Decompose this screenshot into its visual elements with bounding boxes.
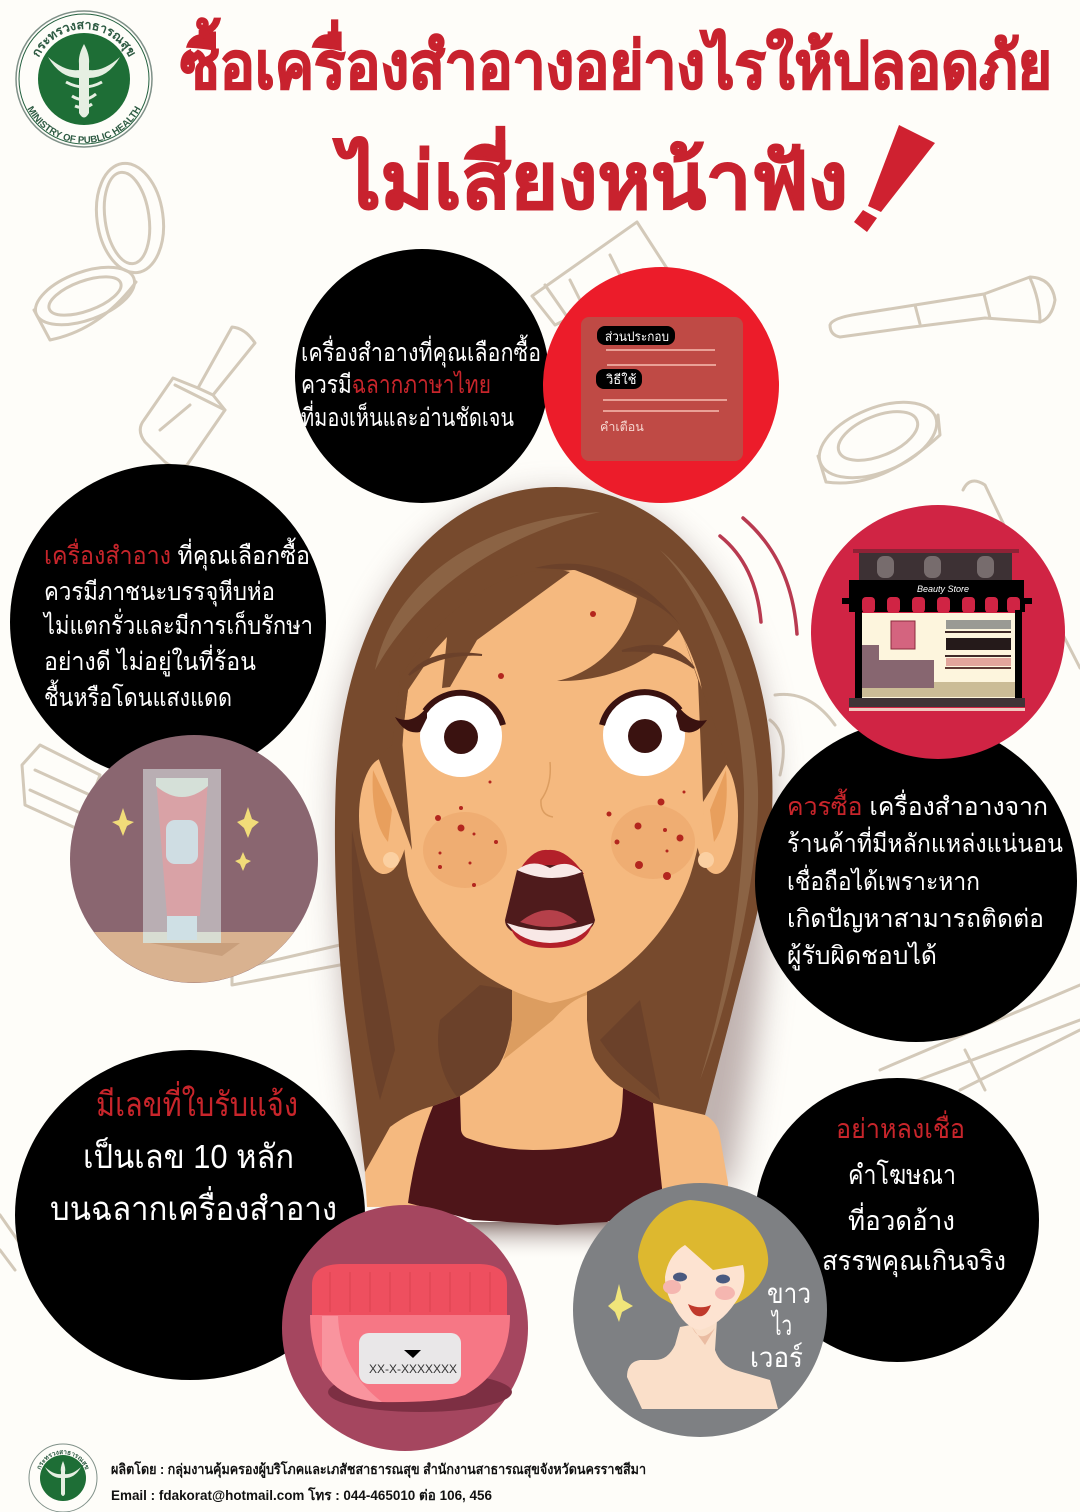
panel: store advice xyxy=(755,720,1077,1042)
arrows: motion arcs xyxy=(720,518,797,634)
neck and shoulders xyxy=(365,970,728,1207)
footer logo xyxy=(28,1444,98,1512)
doodle: compact behind head xyxy=(770,694,835,775)
illustration: shocked woman xyxy=(335,487,772,1260)
footer text: ผลิตโดย : กลุ่มงานคุ้มครองผู้บริโภคและเภสัชสาธารณสุข สำนักงานสาธารณสุขจังหวัดนครราชสีมา xyxy=(111,1460,646,1478)
panel: store advice: ควรซื้อ เครื่องสำอางจาก xyxy=(787,788,1048,821)
hair back xyxy=(335,487,772,1172)
panel: packaging advice: ควรมีภาชนะบรรจุหีบห่อ xyxy=(44,578,275,607)
panel: do not trust ads xyxy=(755,1078,1039,1362)
panel: beauty store illustration: Beauty Store xyxy=(917,584,969,594)
title: ไม่เสี่ยงหน้าฟัง xyxy=(333,126,848,225)
panel: label illustration: ส่วนประกอบ xyxy=(605,329,669,344)
panel: packaging advice xyxy=(10,464,326,780)
panel: packaging advice: ไม่แตกรั่วและมีการเก็บรักษา xyxy=(42,608,313,640)
tank top xyxy=(408,1088,662,1225)
panel: beauty store illustration xyxy=(811,505,1065,759)
doodle: nail brush xyxy=(963,481,1080,668)
doodle: brush xyxy=(830,277,1055,337)
nose xyxy=(541,762,553,817)
ears xyxy=(359,758,409,874)
panel: advert woman: ขาว xyxy=(767,1278,811,1309)
doodle: lipstick left xyxy=(232,945,340,985)
face xyxy=(401,570,707,1003)
panel: advert woman xyxy=(573,1183,827,1437)
panel: cosmetic jar xyxy=(282,1205,528,1451)
lashes xyxy=(395,692,707,732)
panel: registration number advice: เป็นเลข 10 หลัก xyxy=(83,1137,294,1175)
panel: do not trust ads: สรรพคุณเกินจริง xyxy=(822,1246,1006,1278)
panel: cosmetic jar: XX-X-XXXXXXX xyxy=(369,1362,457,1376)
mouth xyxy=(505,850,595,948)
doodle: compact behind left xyxy=(22,745,100,830)
panel: store advice: ร้านค้าที่มีหลักแหล่งแน่นอน xyxy=(787,826,1063,858)
panel: packaging advice: เครื่องสำอาง ที่คุณเลือกซื้อ xyxy=(44,537,310,571)
panel: registration number advice xyxy=(15,1050,365,1380)
doodle: nail polish xyxy=(140,327,255,467)
doodle: open compact xyxy=(28,159,170,340)
logo: Ministry of Public Health: กระทรวงสาธารณสุข xyxy=(34,21,136,58)
logo: Ministry of Public Health xyxy=(15,10,153,148)
shadow xyxy=(337,495,771,1190)
eyes xyxy=(420,695,502,777)
spots xyxy=(435,611,686,887)
footer text xyxy=(111,1460,646,1503)
panel: label illustration: คำเตือน xyxy=(600,420,644,434)
cheeks xyxy=(423,812,507,888)
panel: do not trust ads: คำโฆษณา xyxy=(848,1160,956,1190)
footer text: Email : fdakorat@hotmail.com โทร : 044-465010 ต่อ 106, 456 xyxy=(111,1486,492,1503)
doodle: lipstick bottom right xyxy=(880,985,1080,1090)
icon: exclamation mark xyxy=(854,125,935,232)
panel: Thai label advice: ควรมีฉลากภาษาไทย xyxy=(301,370,491,399)
hair strands over face xyxy=(378,570,570,850)
panel: do not trust ads: อย่าหลงเชื่อ xyxy=(836,1110,965,1144)
eyebrows xyxy=(409,646,694,675)
panel: cosmetic tube xyxy=(70,735,318,983)
logo: Ministry of Public Health: MINISTRY OF PUBLIC HEALTH xyxy=(28,106,140,143)
doodle: compact case xyxy=(809,387,947,493)
panel: Thai label advice xyxy=(295,249,549,503)
panel: do not trust ads: ที่อวดอ้าง xyxy=(848,1202,955,1236)
panel: registration number advice: มีเลขที่ใบรับแจ้ง xyxy=(96,1081,298,1124)
panel: advert woman: ไว xyxy=(771,1310,792,1341)
doodle: tube xyxy=(532,222,668,325)
panel: advert woman: เวอร์ xyxy=(750,1342,803,1373)
panel: store advice: เชื่อถือได้เพราะหาก xyxy=(787,864,980,896)
panel: Thai label advice: เครื่องสำอางที่คุณเลือกซื้อ xyxy=(301,334,541,368)
panel: store advice: เกิดปัญหาสามารถติดต่อ xyxy=(787,905,1044,933)
footer logo: กระทรวงสาธารณสุข xyxy=(38,1450,89,1470)
panel: packaging advice: อย่างดี ไม่อยู่ในที่ร้อน xyxy=(44,644,256,677)
doodle: fragment left xyxy=(0,1215,35,1270)
panel: label illustration: วิธีใช้ xyxy=(605,372,637,387)
panel: label illustration xyxy=(543,267,779,503)
panel: packaging advice: ชื้นหรือโดนแสงแดด xyxy=(44,679,232,712)
title xyxy=(180,17,1052,225)
panel: registration number advice: บนฉลากเครื่องสำอาง xyxy=(50,1186,337,1227)
panel: Thai label advice: ที่มองเห็นและอ่านชัดเจน xyxy=(301,400,514,432)
panel: store advice: ผู้รับผิดชอบได้ xyxy=(787,941,937,971)
